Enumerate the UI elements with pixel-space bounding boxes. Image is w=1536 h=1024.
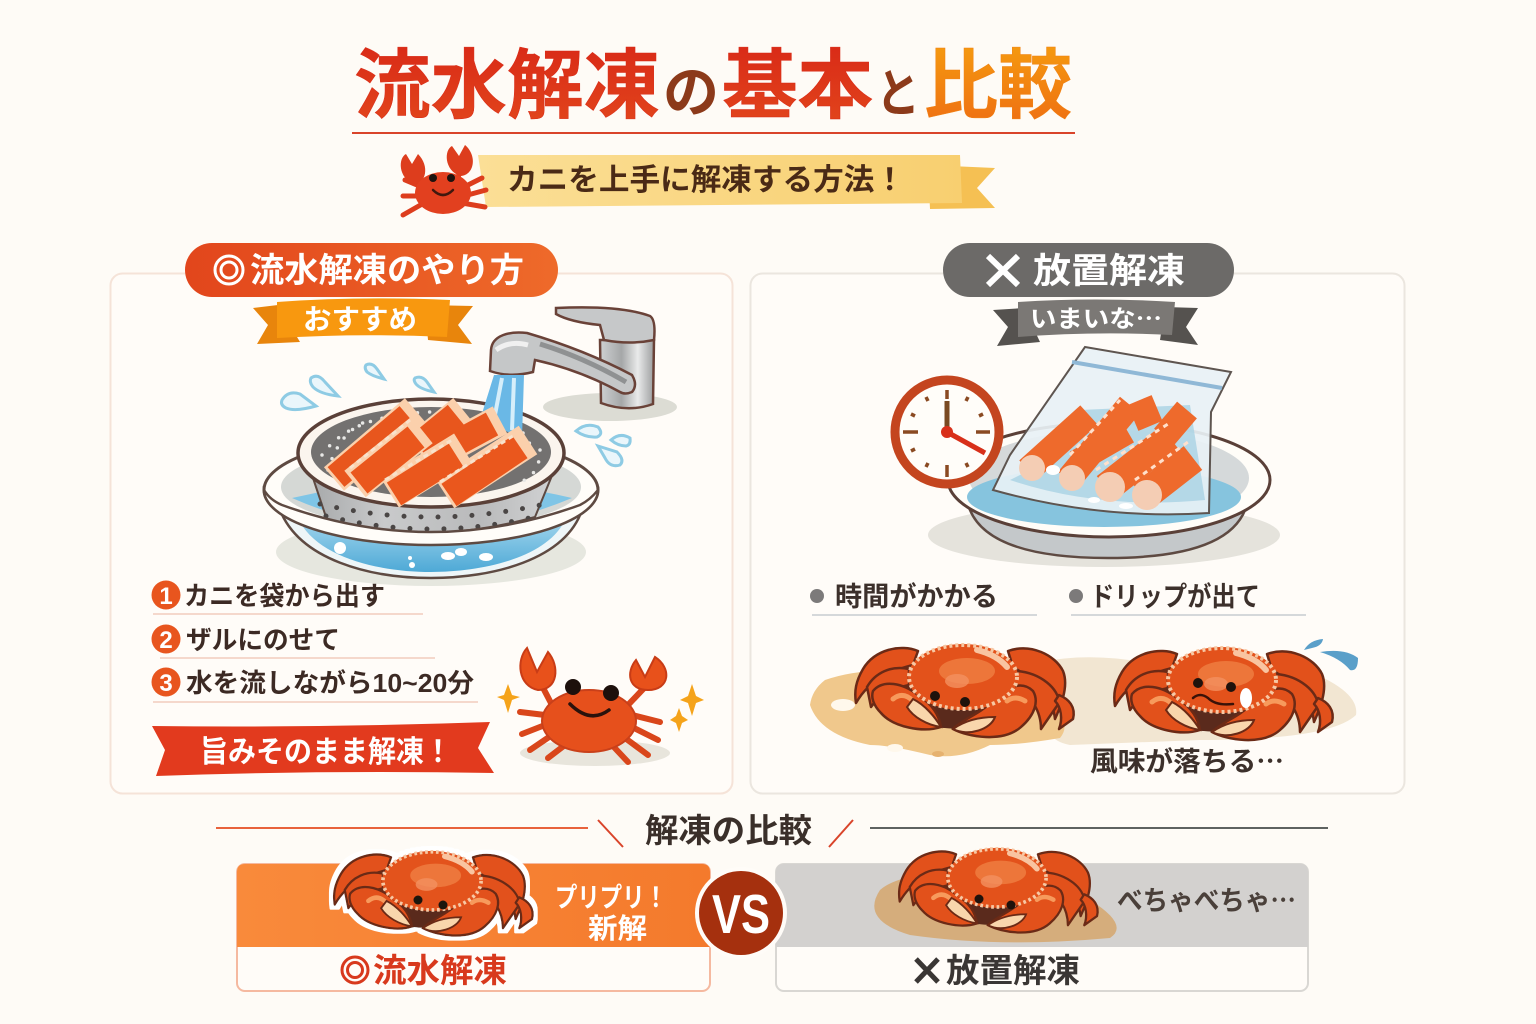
- ribbon: recommended: [253, 298, 473, 344]
- card: left at room temp: [776, 848, 1308, 991]
- ribbon: not great: [993, 299, 1198, 346]
- illustration: freezer bag: [993, 347, 1231, 514]
- card: left at room temp: 放置解凍: [946, 952, 1080, 989]
- icon: happy crab: [497, 648, 704, 766]
- drawback bullets: [810, 581, 1306, 615]
- steps list: カニを袋から出す: [184, 581, 385, 611]
- heading: right pill: [943, 243, 1234, 297]
- heading: left pill: [185, 243, 558, 297]
- illustration: water stream: [480, 375, 524, 438]
- icon: mushy crab: [874, 848, 1117, 942]
- illustration: faucet: [490, 307, 677, 421]
- title: [352, 44, 1075, 133]
- steps list: 水を流しながら10~20分: [186, 668, 474, 698]
- illustration: bowl: [264, 436, 598, 586]
- heading: comparison: [216, 812, 1328, 849]
- title: 比較: [924, 44, 1072, 129]
- badge: VS: VS: [712, 883, 770, 945]
- icon: firm crab: [334, 851, 533, 936]
- card: running water: 流水解凍: [373, 952, 507, 989]
- subtitle ribbon: [478, 155, 995, 209]
- heading: comparison: 解凍の比較: [645, 812, 812, 849]
- icon: sweat drops: [1304, 639, 1358, 670]
- illustration: drip puddles: [810, 657, 1356, 757]
- title: の: [663, 61, 719, 124]
- banner: keep the flavour: [152, 722, 494, 776]
- steps list: 3: [159, 670, 173, 697]
- card: running water: 新解: [588, 913, 647, 944]
- banner: keep the flavour: 旨みそのまま解凍！: [200, 736, 452, 769]
- icon: water drops: [282, 364, 630, 466]
- illustration: plate with water: [928, 423, 1280, 567]
- subtitle ribbon: カニを上手に解凍する方法！: [507, 164, 905, 197]
- illustration: bowl front rim: [264, 490, 598, 545]
- illustration: crab legs in colander: [334, 410, 528, 495]
- badge: VS: [695, 867, 787, 959]
- icon: header crab: [401, 145, 486, 215]
- title: 流水解凍: [354, 44, 660, 129]
- illustration: colander: [298, 399, 564, 533]
- steps list: [152, 580, 478, 702]
- ribbon: recommended: おすすめ: [303, 304, 417, 335]
- title: と: [876, 66, 920, 124]
- illustration: thawed crab left: [855, 644, 1074, 737]
- icon: clock: [895, 380, 999, 484]
- steps list: ザルにのせて: [186, 625, 340, 655]
- panel: right method: [750, 274, 1404, 794]
- drawback bullets: ドリップが出て: [1090, 581, 1260, 612]
- card: running water: [237, 851, 710, 991]
- illustration: sad crab right: [1114, 647, 1333, 740]
- steps list: 2: [159, 627, 173, 654]
- card: left at room temp: べちゃべちゃ…: [1117, 879, 1296, 918]
- drawback bullets: 時間がかかる: [835, 581, 998, 612]
- steps list: 1: [159, 583, 173, 610]
- card: running water: プリプリ！: [555, 883, 667, 913]
- heading: right pill: 放置解凍: [1033, 252, 1185, 291]
- text: flavour drops: 風味が落ちる…: [1090, 740, 1284, 779]
- ribbon: not great: いまいな…: [1030, 299, 1162, 334]
- title: 基本: [722, 44, 873, 129]
- heading: left pill: 流水解凍のやり方: [250, 252, 524, 290]
- panel: left method: [110, 274, 732, 794]
